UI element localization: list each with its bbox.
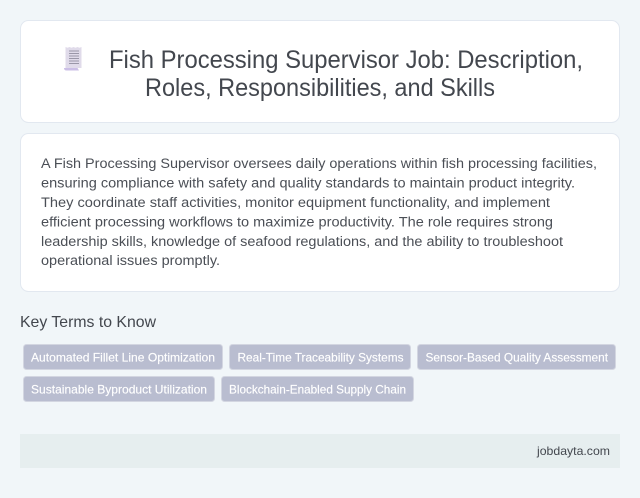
chip: fillet line: Automated Fillet Line Optimization: [31, 350, 215, 364]
text block: description: [41, 156, 597, 269]
title: [109, 46, 583, 102]
chip: sensor: [418, 344, 616, 370]
title: Roles, Responsibilities, and Skills: [145, 74, 495, 102]
chip: blockchain: Blockchain-Enabled Supply Chain: [229, 382, 406, 396]
chip: blockchain: [222, 376, 414, 402]
text block: description: operational issues promptly.: [41, 253, 220, 269]
panel: title card: [20, 20, 620, 122]
heading: key terms: Key Terms to Know: [20, 314, 156, 331]
panel: description: [20, 134, 620, 292]
chip: traceability: Real-Time Traceability Systems: [238, 350, 404, 364]
footer: site name: jobdayta.com: [536, 444, 610, 458]
text block: description: They coordinate staff activities, monitor equipment functionality, and implement: [41, 195, 550, 211]
icon: document scroll: [64, 47, 82, 70]
text block: description: efficient processing workflows to maximize productivity. The role requires strong: [41, 214, 553, 230]
chip: byproduct: [24, 376, 214, 402]
chips: key terms: [24, 344, 616, 402]
chip: traceability: [230, 344, 410, 370]
chip: sensor: Sensor-Based Quality Assessment: [426, 350, 609, 364]
chip: byproduct: Sustainable Byproduct Utilization: [31, 382, 207, 396]
chip: fillet line: [24, 344, 222, 370]
text block: description: ensuring compliance with safety and quality standards to maintain product integrity.: [41, 176, 575, 192]
text block: description: leadership skills, knowledge of seafood regulations, and the ability to troubleshoot: [41, 234, 563, 250]
footer: [20, 434, 620, 468]
title: Fish Processing Supervisor Job: Description,: [109, 46, 583, 74]
text block: description: A Fish Processing Supervisor oversees daily operations within fish processing facilities,: [41, 156, 597, 172]
